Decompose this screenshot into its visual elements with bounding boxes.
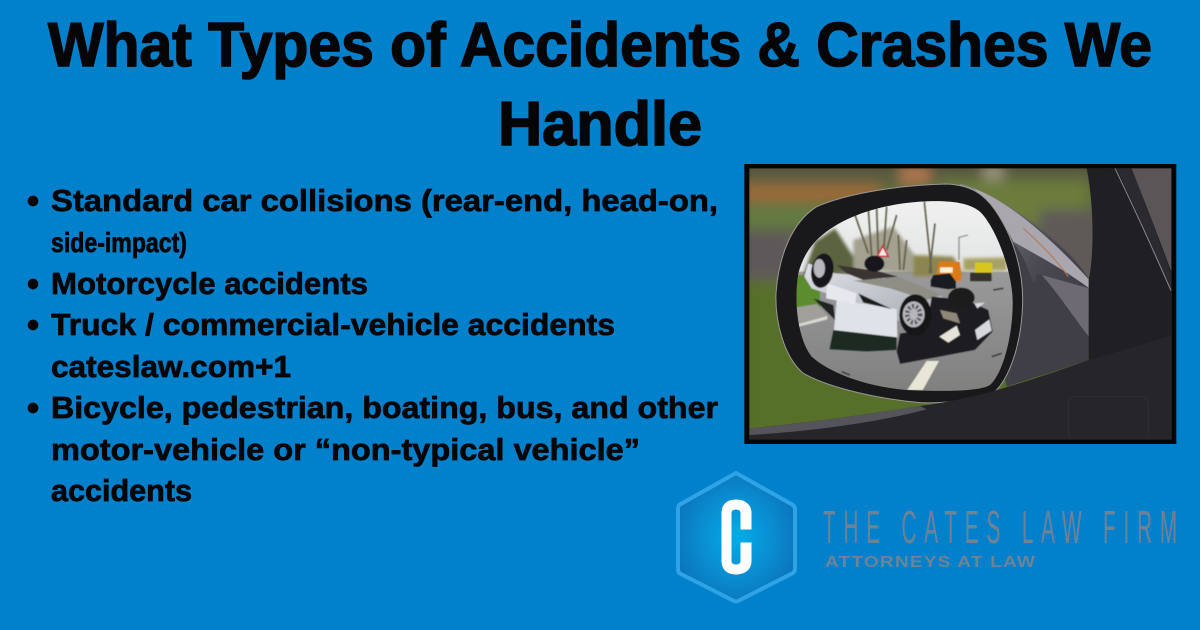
mirror glass scene bbox=[796, 201, 1013, 391]
orange truck bbox=[937, 262, 962, 282]
car door bbox=[749, 333, 1171, 440]
warning sign bbox=[877, 246, 888, 256]
wheels bbox=[810, 253, 834, 288]
yellow truck bbox=[975, 263, 992, 274]
mirror rim bbox=[776, 184, 1023, 403]
logo: firm name: THE CATES LAW FIRM bbox=[823, 502, 1177, 553]
street lamp bbox=[959, 235, 968, 260]
photo: overturned car seen in side mirror bbox=[744, 164, 1176, 444]
bullet list of accident types: cateslaw.com+1 bbox=[51, 349, 291, 384]
bullet list of accident types: Motorcycle accidents bbox=[51, 266, 368, 301]
bullet list of accident types: motor-vehicle or “non-typical vehicle” bbox=[51, 432, 640, 467]
wreckage front bbox=[897, 297, 993, 364]
blurred background bbox=[749, 168, 1172, 440]
bullet list of accident types bbox=[28, 183, 718, 508]
road markings bbox=[907, 361, 939, 390]
logo: hexagon C icon bbox=[676, 471, 797, 604]
overturned car bbox=[804, 262, 943, 322]
mirror housing bbox=[960, 184, 1089, 387]
dark car bbox=[931, 273, 956, 289]
title: What Types of Accidents & Crashes We bbox=[48, 11, 1152, 80]
bullet list of accident types: accidents bbox=[51, 473, 192, 508]
bullet list of accident types: Truck / commercial-vehicle accidents bbox=[51, 307, 615, 342]
logo: firm name: ATTORNEYS AT LAW bbox=[825, 553, 1035, 571]
window pillar bbox=[1087, 168, 1171, 360]
bullet list of accident types: Standard car collisions (rear-end, head-on, bbox=[51, 183, 718, 218]
title bbox=[47, 11, 1152, 159]
black photo frame bbox=[744, 164, 1176, 444]
bullet list of accident types: side-impact) bbox=[51, 227, 187, 258]
trees bbox=[803, 227, 1007, 277]
bullet list of accident types: Bicycle, pedestrian, boating, bus, and other bbox=[51, 390, 718, 425]
title: Handle bbox=[498, 90, 702, 159]
